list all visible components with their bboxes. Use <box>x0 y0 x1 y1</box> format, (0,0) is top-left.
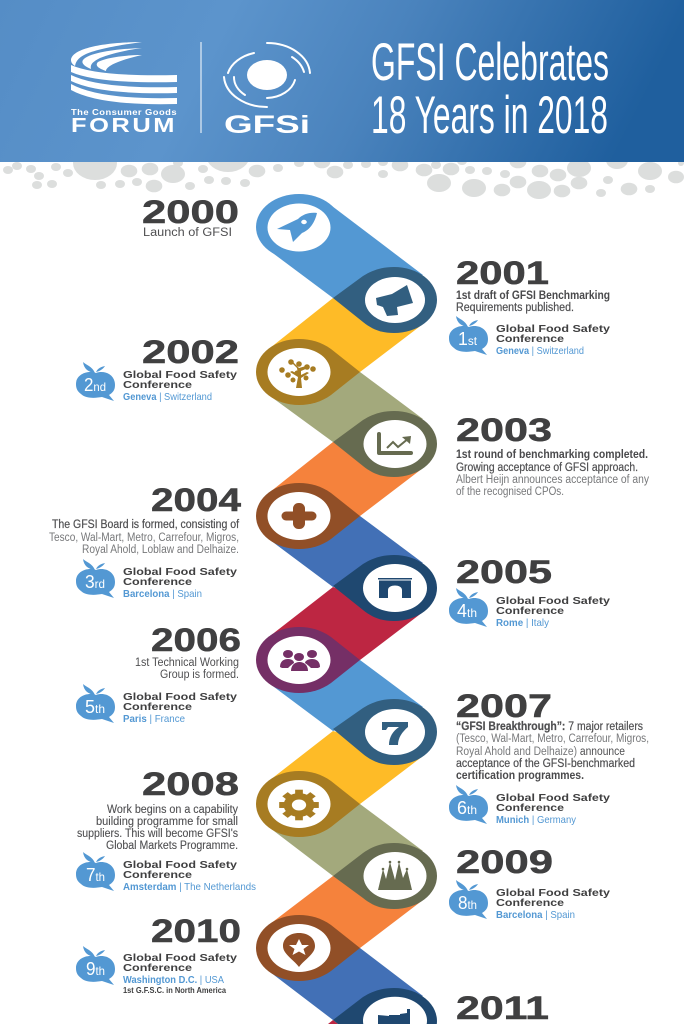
entry: 2010 <box>76 913 241 995</box>
conference 7th: Amsterdam | The Netherlands <box>123 881 256 893</box>
entry: 2004: Royal Ahold, Loblaw and Delhaize. <box>82 544 239 556</box>
entry: 2008: suppliers. This will become GFSI's <box>77 828 238 840</box>
conference 7th: Conference <box>123 870 193 881</box>
node 2010: map pin icon <box>256 915 360 981</box>
conference 9th <box>76 946 238 995</box>
logo: GFSI <box>224 43 310 139</box>
conference 6th: Munich | Germany <box>496 814 577 826</box>
conference 4th: Conference <box>496 606 565 617</box>
entry: 2009: 2009 <box>456 844 553 880</box>
conference 2nd: Geneva | Switzerland <box>123 391 212 403</box>
entry: 2001: Requirements published. <box>456 302 574 314</box>
conference 8th: 8th <box>458 893 477 913</box>
conference 3rd: Global Food Safety <box>123 567 238 578</box>
conference 9th: Conference <box>123 963 193 974</box>
conference 3rd: Conference <box>123 577 193 588</box>
entry: 2001: 2001 <box>456 255 549 291</box>
node 2006: people icon <box>256 627 360 693</box>
entry: 2002 <box>76 334 239 403</box>
entry: 2008: Work begins on a capability <box>107 804 238 816</box>
logo: GFSI: GFSi <box>224 111 310 139</box>
band: after 2011 <box>328 1020 338 1024</box>
entry: 2007: 2007 <box>456 688 552 724</box>
node 2005: arch icon <box>333 555 437 621</box>
entry: 2008 <box>76 766 256 893</box>
logo: The Consumer Goods Forum <box>71 42 177 137</box>
node 2011: factory icon <box>333 988 437 1024</box>
conference 7th: Global Food Safety <box>123 860 238 871</box>
band: 2002 to 2003 <box>270 372 423 442</box>
node 2007: number seven icon: 7 <box>395 744 396 746</box>
zigzag timeline ribbon <box>256 194 437 1024</box>
entry: 2000: 2000 <box>142 194 239 230</box>
conference 8th <box>449 880 611 921</box>
conference 5th: Conference <box>123 702 193 713</box>
entry: 2003: Albert Heijn announces acceptance of any <box>456 474 649 486</box>
decorative bubbles <box>3 138 684 199</box>
entry: 2007: “GFSI Breakthrough”: 7 major retailers <box>456 721 643 733</box>
entry: 2003: 2003 <box>456 412 552 448</box>
conference 4th: 4th <box>457 601 477 621</box>
band: 2010 to 2011 <box>270 948 423 1020</box>
conference 4th <box>449 588 611 629</box>
conference 3rd: Barcelona | Spain <box>123 588 202 600</box>
conference 9th: 9th <box>86 959 105 979</box>
entry: 2003: 1st round of benchmarking completed. <box>456 449 648 461</box>
band: 2008 to 2009 <box>270 804 423 876</box>
conference 1st: Geneva | Switzerland <box>496 345 584 357</box>
conference 3rd <box>76 559 238 600</box>
entry: 2004: Tesco, Wal-Mart, Metro, Carrefour, Migros, <box>49 532 239 544</box>
conference 4th: Rome | Italy <box>496 617 550 629</box>
conference 1st: 1st <box>458 329 478 349</box>
title <box>371 33 609 145</box>
node 2004: plus icon <box>256 483 360 549</box>
entry: 2007: (Tesco, Wal-Mart, Metro, Carrefour, Migros, <box>456 733 649 745</box>
entry: 2004: The GFSI Board is formed, consisting of <box>52 519 240 531</box>
conference 5th <box>76 684 238 725</box>
entry: 2007 <box>449 688 649 826</box>
conference 9th: 1st G.F.S.C. in North America <box>123 986 227 995</box>
entry: 2006: 1st Technical Working <box>135 657 239 669</box>
band: 2009 to 2010 <box>270 876 423 948</box>
conference 2nd: 2nd <box>84 375 106 395</box>
conference 3rd: 3rd <box>85 572 105 592</box>
conference 8th: Conference <box>496 898 565 909</box>
entry: 2009 <box>449 844 611 921</box>
band: 2000 to 2001 <box>270 203 423 298</box>
entry: 2010: 2010 <box>151 913 241 949</box>
conference 1st: Global Food Safety <box>496 324 611 335</box>
conference 6th <box>449 785 611 826</box>
conference 2nd: Conference <box>123 380 193 391</box>
conference 1st: Conference <box>496 334 565 345</box>
entry: 2006 <box>76 622 241 725</box>
conference 7th <box>76 852 256 893</box>
node 2002: tree icon <box>256 339 360 405</box>
entry: 2007: certification programmes. <box>456 770 584 782</box>
conference 5th: 5th <box>85 697 105 717</box>
entry: 2000: Launch of GFSI <box>143 227 232 239</box>
node 2000: rocket icon <box>268 204 330 252</box>
entry: 2001: 1st draft of GFSI Benchmarking <box>456 290 610 302</box>
entry: 2004: 2004 <box>151 482 241 518</box>
entry: 2005: 2005 <box>456 554 552 590</box>
conference 4th: Global Food Safety <box>496 596 611 607</box>
node 2009: castle icon <box>333 843 437 909</box>
entry: 2003 <box>456 412 649 498</box>
conference 7th: 7th <box>86 865 105 885</box>
band: 2007 to 2008 <box>270 731 423 804</box>
node 2003: chart icon <box>333 411 437 477</box>
conference 8th: Global Food Safety <box>496 888 611 899</box>
band: 2003 to 2004 <box>270 442 423 516</box>
entry: 2000 <box>142 194 239 239</box>
entry: 2006: 2006 <box>151 622 241 658</box>
conference 2nd <box>76 362 238 403</box>
conference 1st <box>449 316 611 357</box>
conference 6th: 6th <box>457 798 477 818</box>
node 2008: gear icon <box>256 771 360 837</box>
entry: 2005 <box>449 554 611 629</box>
band: 2005 to 2006 <box>270 587 423 660</box>
entry: 2008: Global Markets Programme. <box>106 840 238 852</box>
conference 8th: Barcelona | Spain <box>496 909 575 921</box>
conference 6th: Conference <box>496 803 565 814</box>
entry: 2001 <box>449 255 611 357</box>
conference 6th: Global Food Safety <box>496 793 611 804</box>
band: 2006 to 2007 <box>270 660 423 731</box>
node 2001: megaphone icon <box>333 267 437 333</box>
conference 5th: Paris | France <box>123 713 185 725</box>
conference 9th: Washington D.C. | USA <box>123 974 224 986</box>
conference 2nd: Global Food Safety <box>123 370 238 381</box>
logo: The Consumer Goods Forum: FORUM <box>71 115 177 137</box>
entry: 2004 <box>49 482 241 600</box>
start cap <box>256 194 342 260</box>
entry: 2007: acceptance of the GFSI-benchmarked <box>456 758 635 770</box>
band: 2001 to 2002 <box>270 298 423 372</box>
entry: 2007: Royal Ahold and Delhaize) announce <box>456 746 625 758</box>
entry: 2008: building programme for small <box>96 816 238 828</box>
conference 9th: Global Food Safety <box>123 953 238 964</box>
node 2007: number seven icon <box>333 699 437 765</box>
entry: 2008: 2008 <box>142 766 239 802</box>
logo: The Consumer Goods Forum: The Consumer Goods <box>71 107 177 117</box>
header banner <box>0 0 684 162</box>
entry: 2003: Growing acceptance of GFSI approach. <box>456 462 638 474</box>
entry: 2002: 2002 <box>142 334 239 370</box>
conference 5th: Global Food Safety <box>123 692 238 703</box>
entry: 2006: Group is formed. <box>160 669 239 681</box>
entry: 2003: of the recognised CPOs. <box>456 486 564 498</box>
band: 2004 to 2005 <box>270 516 423 587</box>
